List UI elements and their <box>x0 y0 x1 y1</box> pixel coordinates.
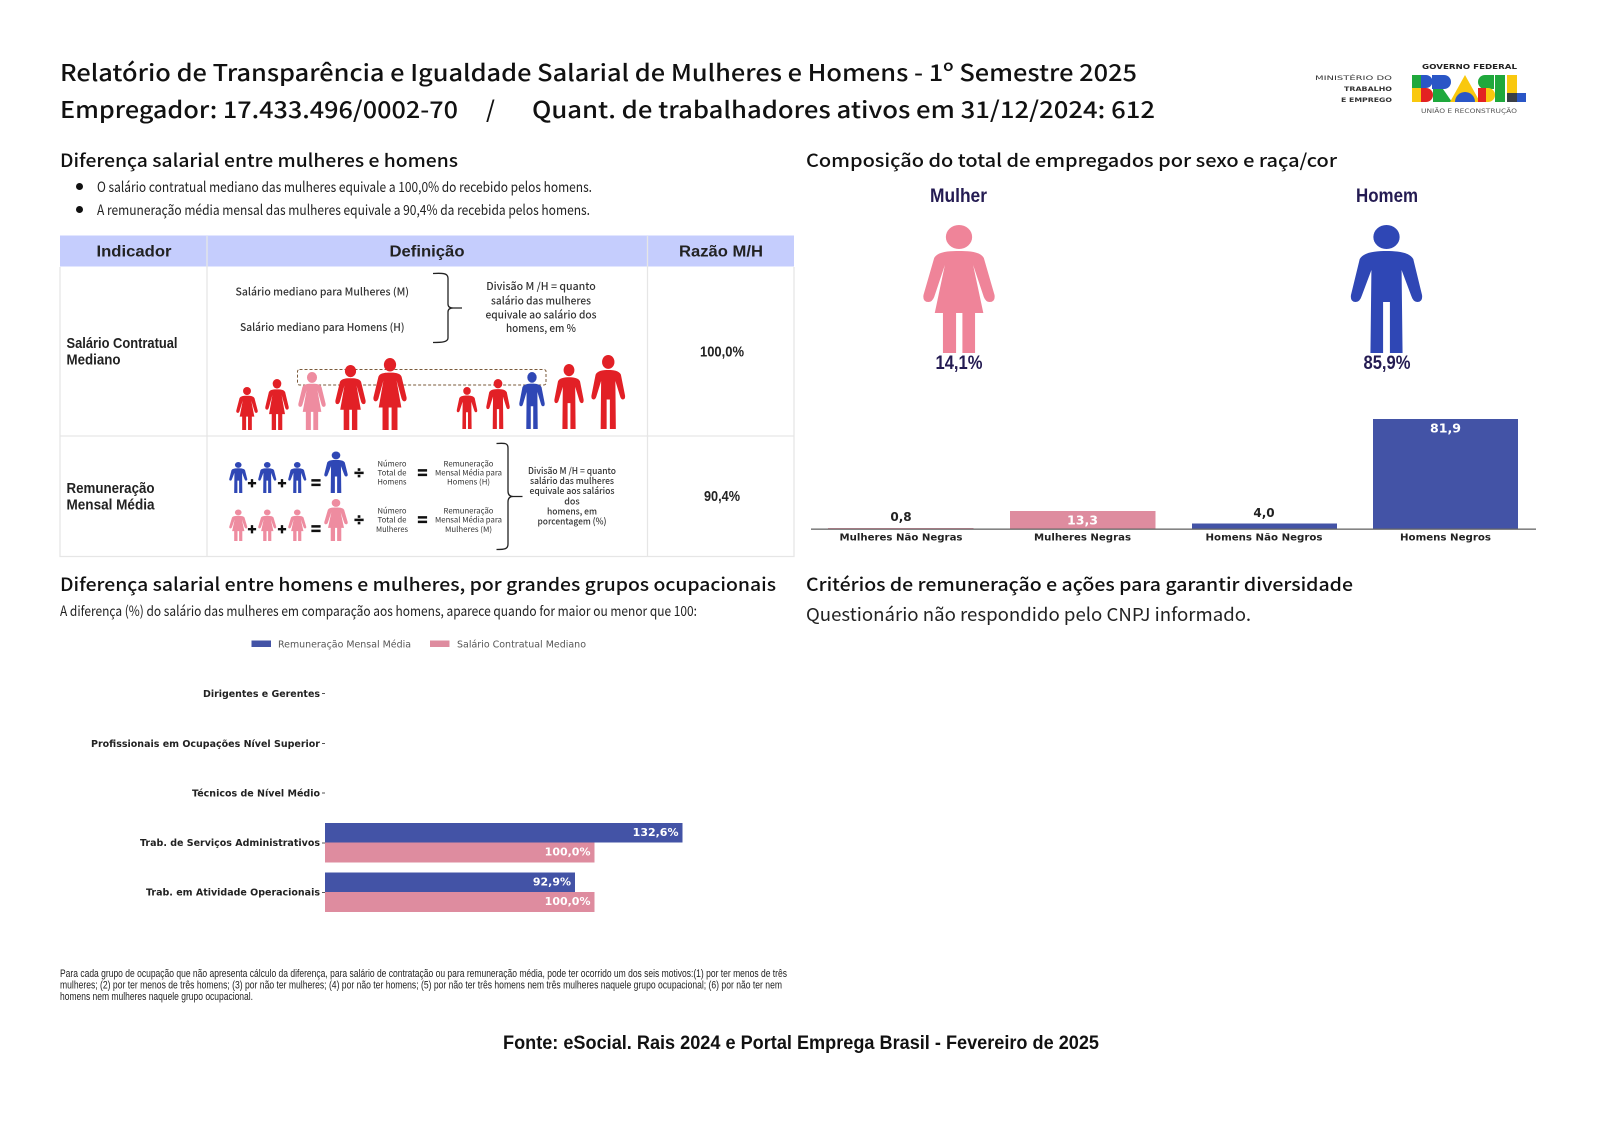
definition: remuneração mulheres: Mulheres <box>376 524 408 535</box>
footnote: homens nem mulheres naquele grupo ocupacional. <box>60 991 253 1003</box>
bar chart: grupos ocupacionais: Profissionais em Ocupações Nível Superior <box>91 739 320 750</box>
bar chart: composição por raça/cor: Mulheres Negras <box>1034 532 1131 544</box>
definition: remuneração homens: = <box>311 474 321 492</box>
definition: remuneração homens: = <box>418 464 428 482</box>
bar chart: composição por raça/cor: 13,3 <box>1067 514 1098 528</box>
definition: remuneração homens <box>229 452 502 493</box>
legend <box>252 640 586 650</box>
bar chart: grupos ocupacionais: Técnicos de Nível Médio <box>192 788 320 800</box>
bar chart: composição por raça/cor: Mulheres Não Negras <box>840 532 963 544</box>
bar chart: grupos ocupacionais: 92,9% <box>533 876 571 888</box>
definition: remuneração homens: Mensal Média para <box>435 468 502 478</box>
brace and division note: dos <box>564 494 580 508</box>
footnote <box>60 968 787 1003</box>
panel: mulher: 14,1% <box>936 353 983 374</box>
logo: Ministério do Trabalho e Emprego / Governo Federal <box>1315 63 1526 115</box>
row labels: Mediano <box>66 352 120 368</box>
bar chart: grupos ocupacionais: Dirigentes e Gerentes <box>203 689 320 700</box>
subtitle: A diferença (%) do salário das mulheres em comparação aos homens, aparece quando for maior ou menor que 100: <box>60 601 697 621</box>
table: indicadores <box>60 236 794 556</box>
table header: Razão M/H <box>679 244 763 260</box>
brace and division note: salário das mulheres <box>530 474 614 487</box>
source footer: Fonte: eSocial. Rais 2024 e Portal Emprega Brasil - Fevereiro de 2025 <box>503 1033 1099 1054</box>
definition: remuneração mulheres: Mensal Média para <box>435 514 502 526</box>
table header <box>96 244 763 260</box>
bar chart: composição por raça/cor: 81,9 <box>1430 422 1461 436</box>
panel: homem: 85,9% <box>1364 353 1411 374</box>
bullet list: A remuneração média mensal das mulheres equivale a 90,4% da recebida pelos homens. <box>97 200 590 220</box>
row labels: Remuneração <box>66 480 154 497</box>
logo: Ministério do Trabalho e Emprego / Governo Federal: MINISTÉRIO DO <box>1315 73 1392 82</box>
legend: Remuneração Mensal Média <box>278 640 411 650</box>
definition: remuneração mulheres: + <box>248 521 257 538</box>
heading: critérios: Critérios de remuneração e ações para garantir diversidade <box>806 571 1353 597</box>
definition: remuneração homens: Homens (H) <box>447 476 490 488</box>
row labels <box>66 335 178 514</box>
ratio values: 100,0% <box>700 344 744 360</box>
logo: Ministério do Trabalho e Emprego / Governo Federal: E EMPREGO <box>1341 96 1393 104</box>
icons: row of women and men <box>236 355 625 430</box>
ratio values: 90,4% <box>704 488 740 505</box>
panel: homem <box>1351 186 1422 374</box>
definition: salário mediano: Divisão M /H = quanto <box>486 279 596 294</box>
bar chart: composição por raça/cor: 0,8 <box>890 510 912 524</box>
logo: Ministério do Trabalho e Emprego / Governo Federal: UNIÃO E RECONSTRUÇÃO <box>1421 108 1517 115</box>
bar chart: grupos ocupacionais: Trab. em Atividade Operacionais <box>146 888 320 898</box>
row labels: Mensal Média <box>66 496 155 514</box>
panel: mulher <box>923 186 995 374</box>
bullet list: O salário contratual mediano das mulheres equivale a 100,0% do recebido pelos homens. <box>97 177 592 197</box>
brace and division note: homens, em <box>547 504 597 518</box>
footnote: mulheres; (2) por ter menos de três homens; (3) por não ter mulheres; (4) por não ter homens; (5) por não ter três homens nem três mulheres naquele grupo ocupacional; (6) por não ter nem <box>60 980 782 992</box>
brace and division note: equivale aos salários <box>530 484 614 497</box>
bar chart: grupos ocupacionais: 100,0% <box>545 846 590 858</box>
bar chart: grupos ocupacionais: 100,0% <box>545 895 590 908</box>
definition: salário mediano <box>236 273 596 342</box>
bar chart: composição por raça/cor: Homens Não Negros <box>1206 532 1323 544</box>
heading: composição: Composição do total de empregados por sexo e raça/cor <box>806 147 1338 173</box>
title: / <box>486 91 495 125</box>
brace and division note <box>496 443 616 550</box>
definition: remuneração mulheres: Mulheres (M) <box>445 524 492 535</box>
definition: remuneração mulheres: Número <box>378 506 407 516</box>
heading: diferença salarial: Diferença salarial entre mulheres e homens <box>60 147 458 173</box>
heading: grupos ocupacionais: Diferença salarial entre homens e mulheres, por grandes grupos ocupacionais <box>60 571 776 597</box>
definition: salário mediano: salário das mulheres <box>491 294 591 308</box>
definition: remuneração mulheres: Total de <box>378 514 406 526</box>
definition: salário mediano: Salário mediano para Homens (H) <box>240 320 404 335</box>
title: Empregador: 17.433.496/0002-70 <box>60 91 458 125</box>
panel: mulher: Mulher <box>930 186 988 207</box>
definition: remuneração homens: + <box>248 475 257 492</box>
title: Relatório de Transparência e Igualdade Salarial de Mulheres e Homens - 1º Semestre 2025 <box>60 54 1137 88</box>
definition: remuneração homens: Total de <box>378 468 406 478</box>
bar chart: composição por raça/cor: Homens Negros <box>1400 532 1491 544</box>
table header: Indicador <box>96 244 172 260</box>
definition: remuneração mulheres: + <box>278 521 287 538</box>
definition: remuneração homens: Remuneração <box>444 458 494 470</box>
title: Quant. de trabalhadores ativos em 31/12/2024: 612 <box>532 91 1155 125</box>
bar chart: composição por raça/cor: 4,0 <box>1253 506 1275 520</box>
panel: homem: Homem <box>1356 186 1418 207</box>
definition: remuneração homens: Número <box>378 458 407 470</box>
bar chart: grupos ocupacionais: 132,6% <box>633 826 678 839</box>
definition: remuneração mulheres: ÷ <box>354 510 364 530</box>
definition: remuneração homens: ÷ <box>354 464 364 482</box>
definition: remuneração mulheres: Remuneração <box>444 506 494 516</box>
logo: Ministério do Trabalho e Emprego / Governo Federal: GOVERNO FEDERAL <box>1422 63 1518 71</box>
brace and division note: porcentagem (%) <box>538 514 606 528</box>
definition: salário mediano: homens, em % <box>506 321 576 336</box>
bullet list <box>76 177 592 220</box>
table header: Definição <box>390 244 465 260</box>
definition: remuneração mulheres: = <box>311 520 321 538</box>
bar chart: grupos ocupacionais: Trab. de Serviços Administrativos <box>140 838 320 849</box>
definition: remuneração homens: + <box>278 475 287 492</box>
definition: remuneração homens: Homens <box>378 476 407 488</box>
text: questionário: Questionário não respondido pelo CNPJ informado. <box>806 601 1251 627</box>
row labels: Salário Contratual <box>66 335 178 352</box>
definition: remuneração mulheres <box>229 499 502 541</box>
definition: salário mediano: equivale ao salário dos <box>486 308 596 322</box>
ratio values <box>700 344 744 505</box>
logo: Ministério do Trabalho e Emprego / Governo Federal: TRABALHO <box>1344 85 1393 93</box>
definition: remuneração mulheres: = <box>418 510 428 530</box>
title <box>60 54 1155 125</box>
definition: salário mediano: Salário mediano para Mulheres (M) <box>236 284 409 300</box>
bar chart: composição por raça/cor <box>811 419 1536 544</box>
footnote: Para cada grupo de ocupação que não apresenta cálculo da diferença, para salário de contratação ou para remuneração média, pode ter ocorrido um dos seis motivos:(1) por ter menos de três <box>60 968 787 980</box>
brace and division note: Divisão M /H = quanto <box>528 464 616 477</box>
bar chart: grupos ocupacionais <box>91 689 682 912</box>
legend: Salário Contratual Mediano <box>457 640 586 650</box>
